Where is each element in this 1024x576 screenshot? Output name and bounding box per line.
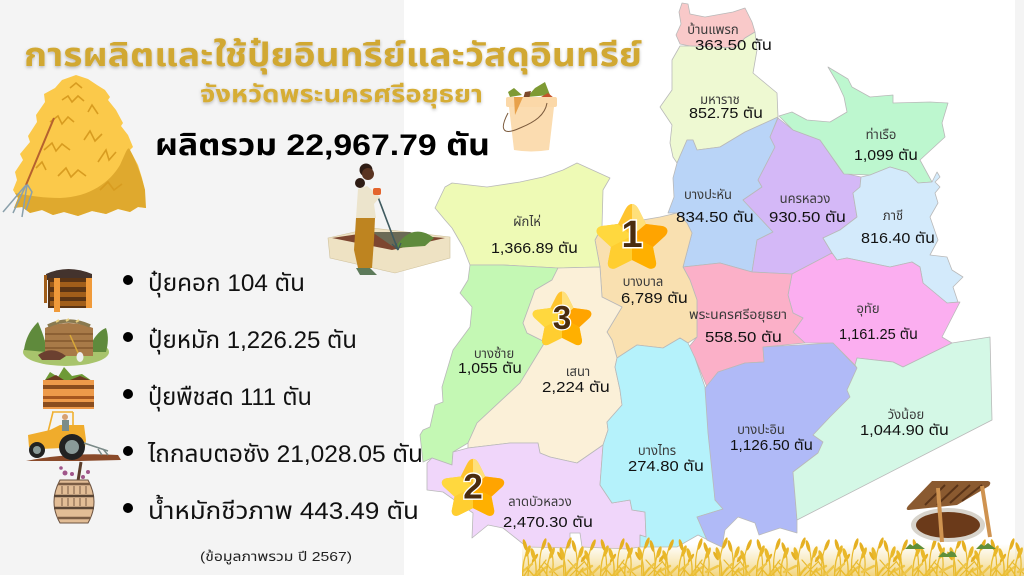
district: ท่าเรือ [779,67,948,183]
label: ปุ๋ยพืชสด 111 ตัน [148,384,312,412]
label: นครหลวง: 930.50 ตัน [769,209,846,226]
total production: ผลิตรวม 22,967.79 ตัน [155,129,490,162]
icon: green manure crate [43,367,94,409]
label: ภาชี: 816.40 ตัน [861,230,935,247]
icon: compost shelter [907,481,990,542]
label: เสนา [542,364,610,396]
icon: manure crate [44,269,92,312]
wheat field band [522,536,1024,576]
star: rank 1 [597,204,667,269]
label: ภาชี [861,208,935,247]
label: บางไทร: 274.80 ตัน [628,458,704,475]
label: ไถกลบตอซัง 21,028.05 ตัน [147,441,423,468]
label: ผักไห่: ผักไห่ [513,214,541,229]
icon: tractor [26,412,121,461]
list item: bio-extract [54,462,419,525]
label: มหาราช: มหาราช [700,92,740,107]
bullet [123,275,133,285]
label: พระนครศรีอยุธยา [689,307,787,346]
label: มหาราช: 852.75 ตัน [689,105,763,122]
background: left panel [0,0,404,575]
star: rank 3 [533,291,591,345]
bullet [123,503,133,513]
label: นครหลวง [769,191,846,226]
label: บางซ้าย: 1,055 ตัน [458,360,522,377]
district: นครหลวง [743,118,861,274]
label: บางปะอิน: บางปะอิน [737,422,785,437]
district: บางปะหัน [668,117,778,272]
district map [420,3,992,549]
label: พระนครศรีอยุธยา: พระนครศรีอยุธยา [689,307,787,322]
map labels [458,22,949,531]
icon: compost heap [23,319,109,366]
fertilizer list [23,269,423,525]
label: ท่าเรือ [854,127,918,164]
label: เสนา: 2,224 ตัน [542,379,610,396]
title: การผลิตและใช้ปุ๋ยอินทรีย์และวัสดุอินทรีย์ [24,36,642,75]
icon: bucket of scraps [503,82,557,152]
district: พระนครศรีอยุธยา [683,263,805,387]
label: ลาดบัวหลวง: ลาดบัวหลวง [508,494,572,509]
icon: barrel [54,462,94,523]
district: เสนา [468,267,622,463]
label: บางซ้าย: บางซ้าย [474,346,514,361]
label: บางปะหัน [676,187,754,226]
label: ภาชี: ภาชี [883,208,903,223]
label: นครหลวง: นครหลวง [780,191,830,206]
district: ลาดบัวหลวง [427,443,646,549]
label: มหาราช [689,92,763,122]
label: พระนครศรีอยุธยา: 558.50 ตัน [705,329,782,346]
label: ปุ๋ยคอก 104 ตัน [148,270,305,298]
label: ผักไห่ [491,214,578,257]
label: วังน้อย [860,407,949,439]
label: บางปะหัน: บางปะหัน [684,187,732,202]
subtitle: จังหวัดพระนครศรีอยุธยา [200,81,483,109]
label: อุทัย [839,301,918,343]
label: เสนา: เสนา [566,364,590,379]
list item: compost [23,319,357,366]
star: rank 3: 3 [553,300,571,337]
district: มหาราช [660,32,778,163]
label: บางบาล [621,274,688,307]
label: บางปะหัน: 834.50 ตัน [676,209,754,226]
bullet [123,332,133,342]
district: บางไทร [600,338,723,547]
bullet [123,389,133,399]
label: อุทัย: 1,161.25 ตัน [839,326,918,343]
district: วังน้อย [793,337,992,520]
label: บางบาล: 6,789 ตัน [621,290,688,307]
label: ท่าเรือ: 1,099 ตัน [854,147,918,164]
district: บางบาล [595,213,697,358]
label: บ้านแพรก: 363.50 ตัน [695,37,772,54]
label: ลาดบัวหลวง: 2,470.30 ตัน [503,514,593,531]
illustration: woman tending compost bed [328,164,450,275]
icon: grass tufts [905,543,996,557]
label: บางซ้าย [458,346,522,377]
label: บางไทร: บางไทร [638,443,676,458]
label: บางไทร [628,443,704,475]
label: อุทัย: อุทัย [856,301,880,316]
district: ภาชี [823,167,963,303]
label: ลาดบัวหลวง [503,494,593,531]
label: บางปะอิน [730,422,813,454]
star: rank 2: 2 [463,467,483,506]
list item: manure [44,269,305,312]
background: right strip [1015,0,1024,576]
icon: haystack with pitchfork [3,75,146,217]
district: บางปะอิน [697,343,857,547]
star: rank 1: 1 [621,214,643,256]
district: บ้านแพรก [676,3,755,48]
label: วังน้อย: วังน้อย [888,407,924,422]
star: rank 2 [442,459,504,516]
label: ปุ๋ยหมัก 1,226.25 ตัน [148,327,357,355]
label: น้ำหมักชีวภาพ 443.49 ตัน [148,494,419,525]
label: บ้านแพรก [687,22,772,54]
source note: (ข้อมูลภาพรวม ปี 2567) [200,549,352,564]
list item: green manure [43,367,312,412]
label: บางปะอิน: 1,126.50 ตัน [730,437,813,454]
district: ผักไห่ [435,163,610,268]
district: บางซ้าย [420,265,558,465]
label: บ้านแพรก: บ้านแพรก [687,22,739,37]
list item: plough stubble [26,412,423,468]
bullet [123,446,133,456]
label: ผักไห่: 1,366.89 ตัน [491,240,578,257]
label: ท่าเรือ: ท่าเรือ [866,127,896,142]
label: บางบาล: บางบาล [623,274,663,289]
label: วังน้อย: 1,044.90 ตัน [860,422,949,439]
district: อุทัย [788,253,960,367]
